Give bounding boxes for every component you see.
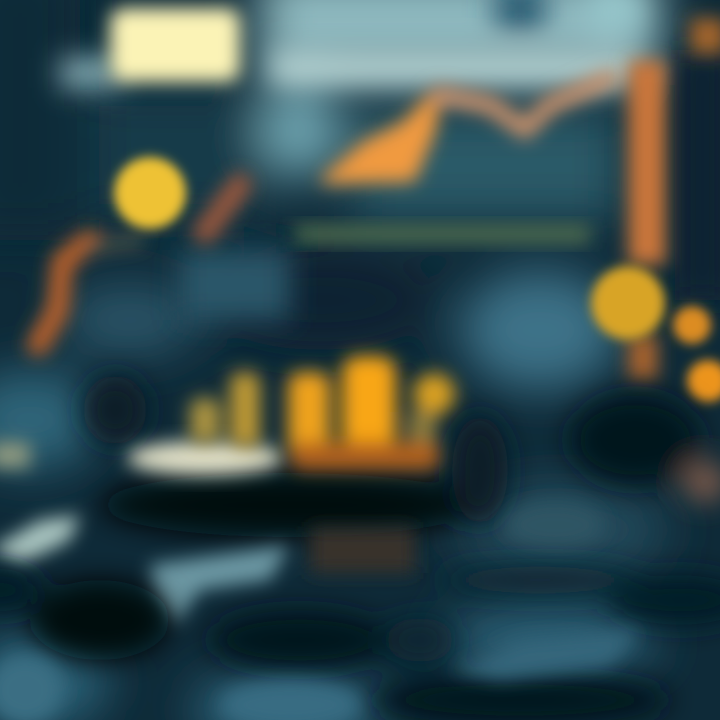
bottom highlights: [0, 630, 640, 720]
glowing cream rectangle: [110, 8, 240, 82]
right gold coins: [591, 266, 720, 402]
dark bowl right: [570, 395, 720, 502]
sky details: [60, 0, 720, 320]
orange column: [628, 18, 720, 380]
coin stacks: [190, 356, 455, 470]
foreground waves: [0, 442, 605, 625]
green dashed band: [295, 225, 590, 243]
white plate: [127, 441, 283, 475]
orange rising chart line: [325, 78, 610, 180]
yellow coin: [114, 157, 186, 229]
orange wave left: [38, 185, 240, 345]
dark platter: [83, 375, 508, 537]
dark foreground: [0, 566, 720, 720]
